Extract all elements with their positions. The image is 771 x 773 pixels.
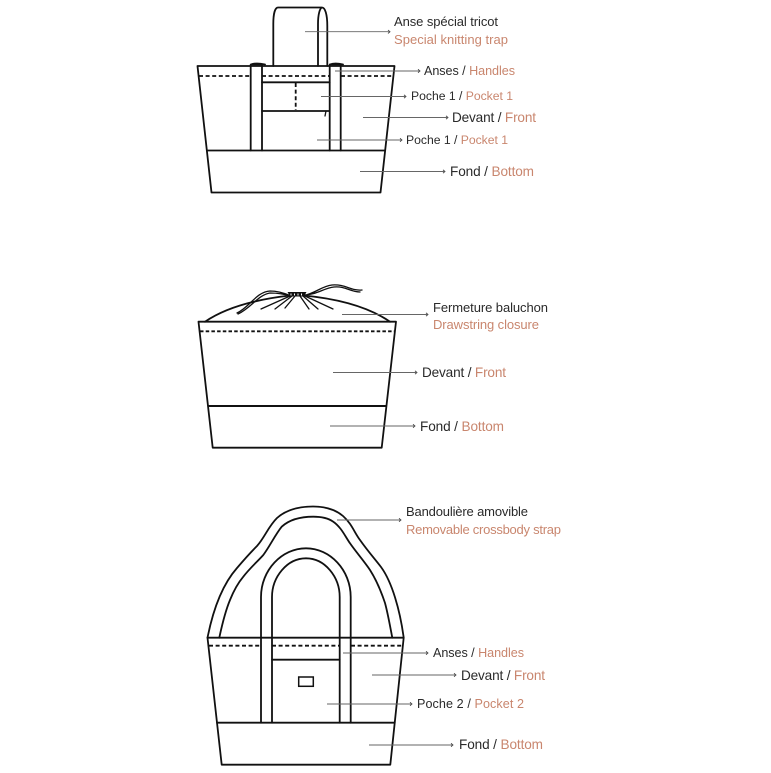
bag body xyxy=(198,66,394,192)
labels: crossbody bag: Poche 2 / Pocket 2 xyxy=(417,697,524,711)
labels: knitting trap bag: Poche 1 / Pocket 1 xyxy=(406,133,508,147)
handles xyxy=(251,64,343,150)
drawstring knot xyxy=(237,285,362,314)
pocket 2 xyxy=(272,659,340,661)
labels: drawstring bag: Drawstring closure xyxy=(433,317,539,332)
labels: crossbody bag: Anses / Handles xyxy=(433,646,524,660)
pocket 1 xyxy=(262,82,330,116)
labels: knitting trap bag: Anses / Handles xyxy=(424,64,515,78)
labels: crossbody bag: Removable crossbody strap xyxy=(406,522,561,537)
panel: bag with drawstring closure xyxy=(198,285,396,448)
labels: knitting trap bag xyxy=(394,14,536,179)
labels: drawstring bag: Fermeture baluchon xyxy=(433,300,548,315)
labels: knitting trap bag: Fond / Bottom xyxy=(450,164,534,179)
labels: knitting trap bag: Special knitting trap xyxy=(394,32,508,47)
panel: bag with knitting trap xyxy=(198,8,394,192)
bottom panel seam xyxy=(217,722,395,724)
pocket label xyxy=(299,677,313,686)
panel: bag with crossbody strap xyxy=(208,506,404,765)
labels: crossbody bag xyxy=(406,504,561,752)
knitting trap strap xyxy=(273,8,327,66)
labels: crossbody bag: Fond / Bottom xyxy=(459,737,543,752)
arrows: crossbody bag xyxy=(327,518,456,747)
labels: drawstring bag xyxy=(420,300,548,434)
top stitching xyxy=(200,330,395,332)
labels: knitting trap bag: Poche 1 / Pocket 1 xyxy=(411,89,513,103)
labels: drawstring bag: Devant / Front xyxy=(422,365,506,380)
crossbody strap xyxy=(208,506,404,638)
top stitching xyxy=(199,75,392,77)
labels: crossbody bag: Bandoulière amovible xyxy=(406,504,528,519)
bottom panel seam xyxy=(209,405,385,407)
drawstring dome xyxy=(205,296,390,322)
bag body xyxy=(198,322,396,448)
bag body xyxy=(208,638,404,765)
labels: crossbody bag: Devant / Front xyxy=(461,668,545,683)
top stitching xyxy=(209,645,402,647)
labels: knitting trap bag: Devant / Front xyxy=(452,110,536,125)
labels: drawstring bag: Fond / Bottom xyxy=(420,419,504,434)
arrows: drawstring bag xyxy=(330,313,428,428)
bottom panel seam xyxy=(207,150,385,152)
handles xyxy=(261,548,351,723)
labels: knitting trap bag: Anse spécial tricot xyxy=(394,14,498,29)
arrows: knitting trap bag xyxy=(305,30,448,173)
